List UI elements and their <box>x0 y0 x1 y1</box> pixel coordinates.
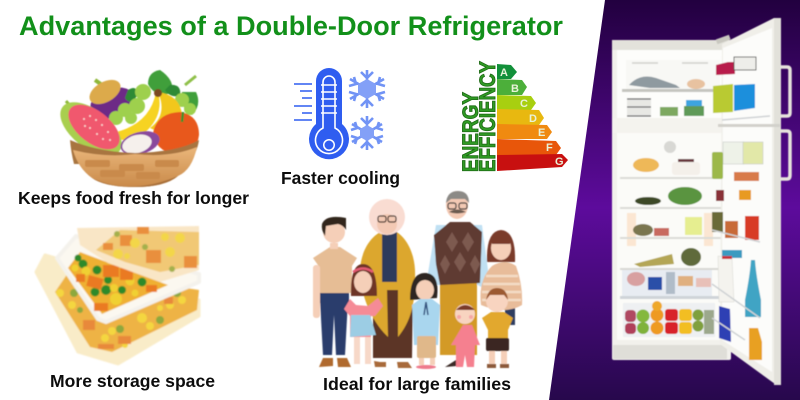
figure: boy <box>482 288 513 368</box>
divider <box>612 118 727 133</box>
chart: energy efficiency rating: D <box>529 113 537 125</box>
illustration: open refrigerator <box>612 18 790 385</box>
figure: girl in blue dress <box>410 273 440 369</box>
label: faster cooling: Faster cooling <box>281 168 400 188</box>
top lid <box>77 226 199 282</box>
icon: door handles <box>773 67 790 179</box>
figure: father <box>313 217 357 367</box>
freezer compartment <box>617 50 723 118</box>
lower tray <box>36 255 199 364</box>
figure: grandfather <box>426 191 488 367</box>
icon: thermometer and snowflakes <box>294 68 385 159</box>
vegetable crisper <box>623 301 715 337</box>
illustration: family <box>313 191 522 369</box>
icon: fruit basket <box>51 70 199 187</box>
chart: energy efficiency rating <box>458 61 568 172</box>
figure: grandmother <box>360 199 415 368</box>
fridge compartment <box>617 133 723 340</box>
chart: energy efficiency rating: G <box>555 156 564 168</box>
fridge door <box>712 18 781 385</box>
figure: girl with headband <box>344 264 383 364</box>
label: ideal for large families: Ideal for large families <box>323 374 511 394</box>
figure: mother <box>480 230 522 325</box>
panel: purple background <box>549 0 800 400</box>
chart: energy efficiency rating: ENERGY <box>458 92 483 172</box>
label: keeps food fresh: Keeps food fresh for longer <box>18 188 249 208</box>
title: Advantages of a Double-Door Refrigerator <box>19 11 563 41</box>
chart: energy efficiency rating: F <box>546 142 553 154</box>
door shelf items <box>716 62 735 75</box>
figure: baby <box>451 304 480 367</box>
image: stacked food containers <box>36 226 199 364</box>
chart: energy efficiency rating: C <box>520 98 528 110</box>
chart: energy efficiency rating: E <box>538 127 545 139</box>
label: more storage space: More storage space <box>50 371 215 391</box>
chart: energy efficiency rating: EFFICIENCY <box>475 61 500 172</box>
chart: energy efficiency rating: A <box>500 67 508 79</box>
middle tray <box>57 236 199 322</box>
chart: energy efficiency rating: B <box>511 83 519 95</box>
fridge cabinet <box>612 40 731 360</box>
